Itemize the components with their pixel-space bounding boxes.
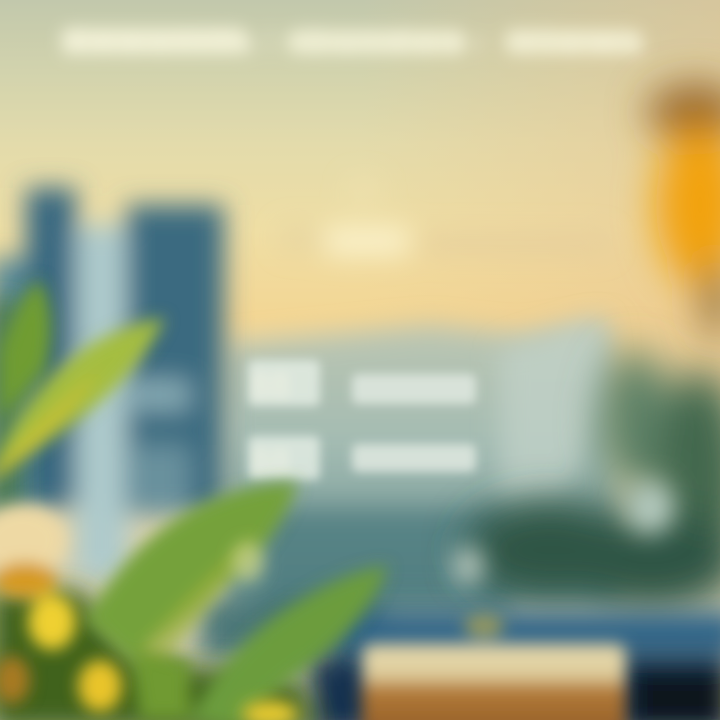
stat block: data rows (248, 360, 476, 482)
yellow flowers bottom left (0, 504, 298, 720)
subtitle text in the sky: Sunset (330, 233, 397, 255)
stat block: data rows: 88 (250, 441, 290, 482)
dark foliage behind leaves, bottom left (0, 300, 320, 720)
leaves bottom (85, 482, 388, 720)
leaves top left (0, 280, 165, 480)
subtitle text in the sky (280, 178, 610, 256)
stat block: data rows: 88 (250, 365, 290, 406)
distant skyline (200, 320, 620, 660)
title: Beautiful Outdoor Views (60, 21, 645, 62)
pale tower on right (500, 318, 610, 500)
drink cup (362, 614, 626, 720)
dark trees right (465, 350, 720, 610)
dark blue foreground band (310, 612, 720, 720)
orange flower top right (647, 84, 720, 340)
tall buildings (0, 188, 224, 580)
tree highlights (454, 482, 674, 584)
